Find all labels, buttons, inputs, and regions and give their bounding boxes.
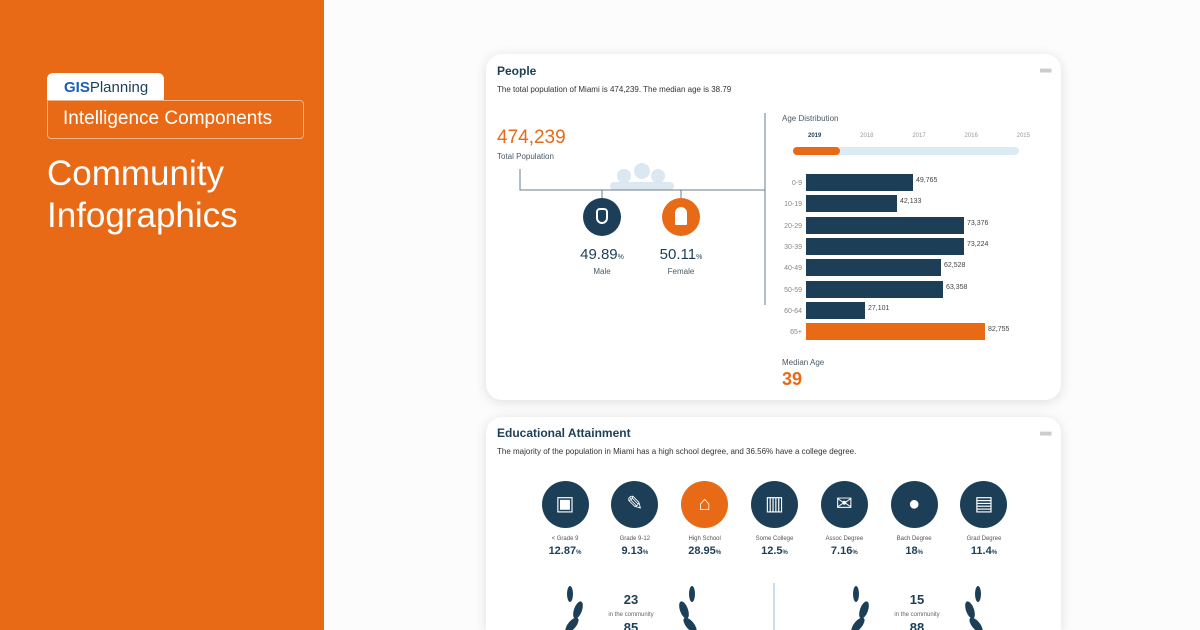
total population: [497, 127, 566, 161]
education icon row: ✉: [836, 493, 853, 515]
description: The majority of the population in Miami has a high school degree, and 36.56% have a college degree.: [497, 447, 856, 456]
education icon row: Grad Degree: [967, 536, 1001, 542]
education icon row: ●: [908, 493, 920, 515]
age distribution chart: 49,765: [916, 177, 938, 184]
education icon row: ▤: [975, 493, 993, 515]
education icon row: < Grade 9: [552, 536, 578, 542]
age distribution chart: 2018: [860, 133, 874, 139]
laurels and ranks: 23: [624, 592, 638, 607]
age distribution chart: 73,224: [967, 241, 989, 248]
age distribution chart: 73,376: [967, 220, 989, 227]
education icon row: ⌂: [699, 493, 711, 515]
median age: Median Age: [782, 358, 824, 367]
age distribution chart: 2017: [912, 133, 926, 139]
laurels and ranks: 15: [910, 592, 924, 607]
subtitle box: [47, 100, 304, 139]
median age: [782, 358, 824, 389]
age distribution chart: 65+: [790, 329, 802, 336]
age distribution chart: 0-9: [792, 180, 802, 187]
card: educational attainment: [486, 417, 1061, 630]
education icon row: [542, 481, 1007, 557]
female: 50.11%: [660, 246, 702, 263]
education icon row: ▥: [765, 493, 784, 515]
title: Infographics: [47, 196, 238, 235]
age distribution chart: 2016: [964, 133, 978, 139]
total population: 474,239: [497, 127, 566, 148]
logo tab: [47, 73, 164, 101]
education icon row: 18%: [905, 545, 923, 557]
laurels and ranks: [565, 583, 983, 630]
age distribution chart: 42,133: [900, 198, 922, 205]
education icon row: High School: [688, 536, 721, 542]
connector lines and people icon: [520, 113, 766, 305]
education icon row: 7.16%: [831, 545, 858, 557]
education icon row: Grade 9-12: [620, 536, 650, 542]
age distribution chart: 63,358: [946, 284, 968, 291]
age distribution chart: 30-39: [784, 244, 802, 251]
heading: People: [497, 64, 536, 78]
age distribution chart: 2015: [1017, 133, 1030, 139]
education icon row: 28.95%: [688, 545, 721, 557]
laurels and ranks: in the community: [894, 612, 940, 618]
heading: Educational Attainment: [497, 426, 631, 440]
median age: 39: [782, 369, 802, 389]
male: 49.89%: [580, 246, 624, 263]
total population: Total Population: [497, 152, 554, 161]
education icon row: Assoc Degree: [825, 536, 863, 542]
title: [47, 154, 238, 235]
age distribution chart: 20-29: [784, 223, 802, 230]
education icon row: Bach Degree: [897, 536, 932, 542]
education icon row: ▣: [556, 493, 574, 515]
female: Female: [668, 267, 694, 276]
education icon row: 12.87%: [549, 545, 581, 557]
male: Male: [593, 267, 611, 276]
age distribution chart: 40-49: [784, 265, 802, 272]
age distribution chart: Age Distribution: [782, 114, 838, 123]
age distribution chart: 62,528: [944, 262, 966, 269]
education icon row: 12.5%: [761, 545, 788, 557]
education icon row: Some College: [756, 536, 793, 542]
male: [580, 198, 624, 276]
card: people: ■■■: [1040, 66, 1051, 75]
female: [660, 198, 702, 276]
education icon row: ✎: [626, 493, 643, 515]
age distribution chart: 82,755: [988, 326, 1010, 333]
description: The total population of Miami is 474,239. The median age is 38.79: [497, 85, 731, 94]
age distribution chart: [782, 114, 1030, 340]
age distribution chart: 60-64: [784, 308, 802, 315]
education icon row: 11.4%: [971, 545, 997, 557]
education icon row: 9.13%: [621, 545, 648, 557]
age distribution chart: 2019: [808, 133, 821, 139]
age distribution chart: 27,101: [868, 305, 890, 312]
age distribution chart: 10-19: [784, 201, 802, 208]
card: educational attainment: ■■■: [1040, 429, 1051, 438]
left orange panel: [0, 0, 324, 630]
subtitle box: Intelligence Components: [63, 108, 272, 129]
laurels and ranks: in the community: [608, 612, 654, 618]
age distribution chart: 50-59: [784, 287, 802, 294]
logo tab: GISPlanning: [64, 79, 148, 96]
title: Community: [47, 154, 224, 193]
card: people: [486, 54, 1061, 400]
